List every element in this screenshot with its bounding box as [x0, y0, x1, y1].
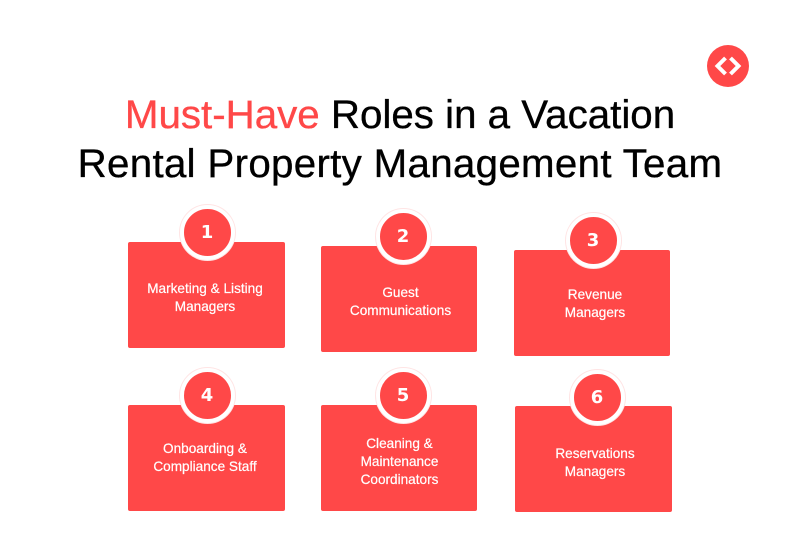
card 4 — [128, 404, 285, 510]
number 2: 2 — [397, 226, 409, 247]
number 5 — [376, 368, 430, 423]
number 5: 5 — [397, 385, 409, 406]
title: Rental Property Management Team — [78, 141, 722, 186]
number 6: 6 — [591, 387, 603, 408]
card 5: Maintenance — [361, 454, 438, 468]
number 2 — [376, 209, 430, 264]
number 1 — [180, 205, 234, 260]
number 3: 3 — [587, 230, 599, 251]
card 3: Revenue — [568, 286, 622, 302]
number 4 — [180, 368, 234, 423]
title — [78, 92, 722, 186]
card 2: Communications — [350, 302, 451, 318]
card 1: Managers — [175, 299, 235, 314]
card 4: Compliance Staff — [153, 458, 257, 474]
card 4: Onboarding & — [163, 440, 247, 456]
card 5: Coordinators — [361, 472, 438, 486]
card 2: Guest — [382, 284, 419, 300]
number 6 — [570, 370, 624, 425]
card 3 — [514, 250, 670, 356]
title: Must-Have Roles in a Vacation — [125, 92, 675, 137]
number 4: 4 — [201, 385, 213, 406]
card 5 — [321, 404, 477, 510]
number 1: 1 — [201, 222, 213, 243]
card 6: Reservations — [555, 446, 635, 460]
card 6 — [515, 406, 672, 512]
card 5: Cleaning & — [366, 436, 433, 450]
logo icon — [707, 45, 749, 87]
card 1 — [128, 242, 285, 348]
number 3 — [566, 213, 620, 268]
card 2 — [321, 246, 477, 352]
card 3: Managers — [565, 304, 625, 320]
card 1: Marketing & Listing — [147, 281, 263, 296]
card 6: Managers — [565, 464, 625, 478]
